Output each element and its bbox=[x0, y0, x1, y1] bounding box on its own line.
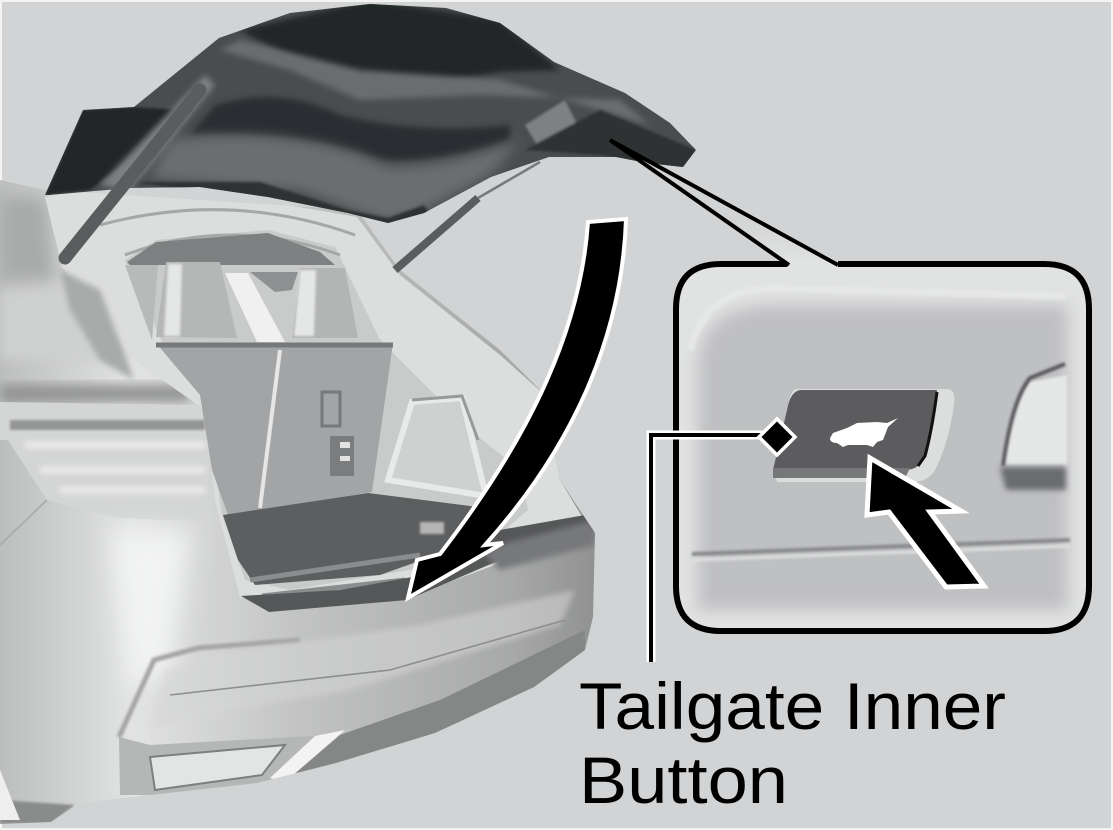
corner shadow bbox=[0, 800, 75, 824]
tailgate opening frame bbox=[45, 190, 590, 600]
label: Tailgate Inner Button: Button bbox=[579, 743, 788, 817]
right tailgate support strut bbox=[395, 162, 540, 270]
inset right opening bbox=[1003, 375, 1067, 465]
folded seat back bbox=[156, 343, 393, 515]
tailgate recessed interior bbox=[190, 97, 510, 161]
inset border bbox=[676, 264, 1089, 631]
left frame shadow lobe bbox=[60, 270, 134, 380]
car body bbox=[0, 170, 600, 830]
cargo opening bbox=[125, 230, 528, 590]
arrow: closing direction bbox=[408, 219, 626, 598]
panel: inset detail of inner button bbox=[615, 143, 1089, 631]
headrests bbox=[156, 262, 237, 338]
arrow: press button bbox=[867, 458, 984, 587]
inset top highlight bbox=[690, 294, 1064, 349]
callout leader from tailgate to inset bbox=[610, 140, 838, 265]
inset grey surface bbox=[698, 305, 1068, 615]
leader wedge from tailgate to inset bbox=[615, 143, 838, 266]
white gap between seats bbox=[225, 273, 285, 342]
rear quarter panel bbox=[0, 170, 600, 830]
lower valance bbox=[285, 630, 585, 782]
icon: car with open tailgate glyph bbox=[830, 418, 898, 447]
body highlight bbox=[110, 530, 190, 690]
tailgate hinge side bbox=[45, 107, 180, 195]
tail light bbox=[0, 402, 190, 520]
tailgate handle side bbox=[524, 100, 577, 144]
label leader line bbox=[651, 419, 795, 662]
bumper lower crease bbox=[119, 640, 300, 737]
bright chrome strip bbox=[270, 730, 345, 782]
bumper dark lip bbox=[241, 515, 595, 612]
label: Tailgate Inner Button bbox=[579, 669, 1006, 817]
seat latches bbox=[322, 392, 340, 426]
label: Tailgate Inner Button: Tailgate Inner bbox=[579, 669, 1006, 743]
ceiling strip bbox=[127, 233, 335, 265]
cargo floor bbox=[223, 493, 478, 585]
icon: button recess bbox=[774, 389, 954, 482]
tailgate top panel bbox=[240, 4, 560, 78]
left tailgate support strut bbox=[65, 90, 200, 258]
side trim with window bbox=[388, 398, 486, 496]
exhaust trim bbox=[119, 735, 330, 795]
upper arch detail bbox=[100, 210, 355, 255]
open tailgate bbox=[40, 0, 700, 230]
inset lower groove bbox=[692, 540, 1070, 554]
interior sides bbox=[125, 265, 158, 340]
icon: tailgate button bbox=[773, 390, 937, 470]
